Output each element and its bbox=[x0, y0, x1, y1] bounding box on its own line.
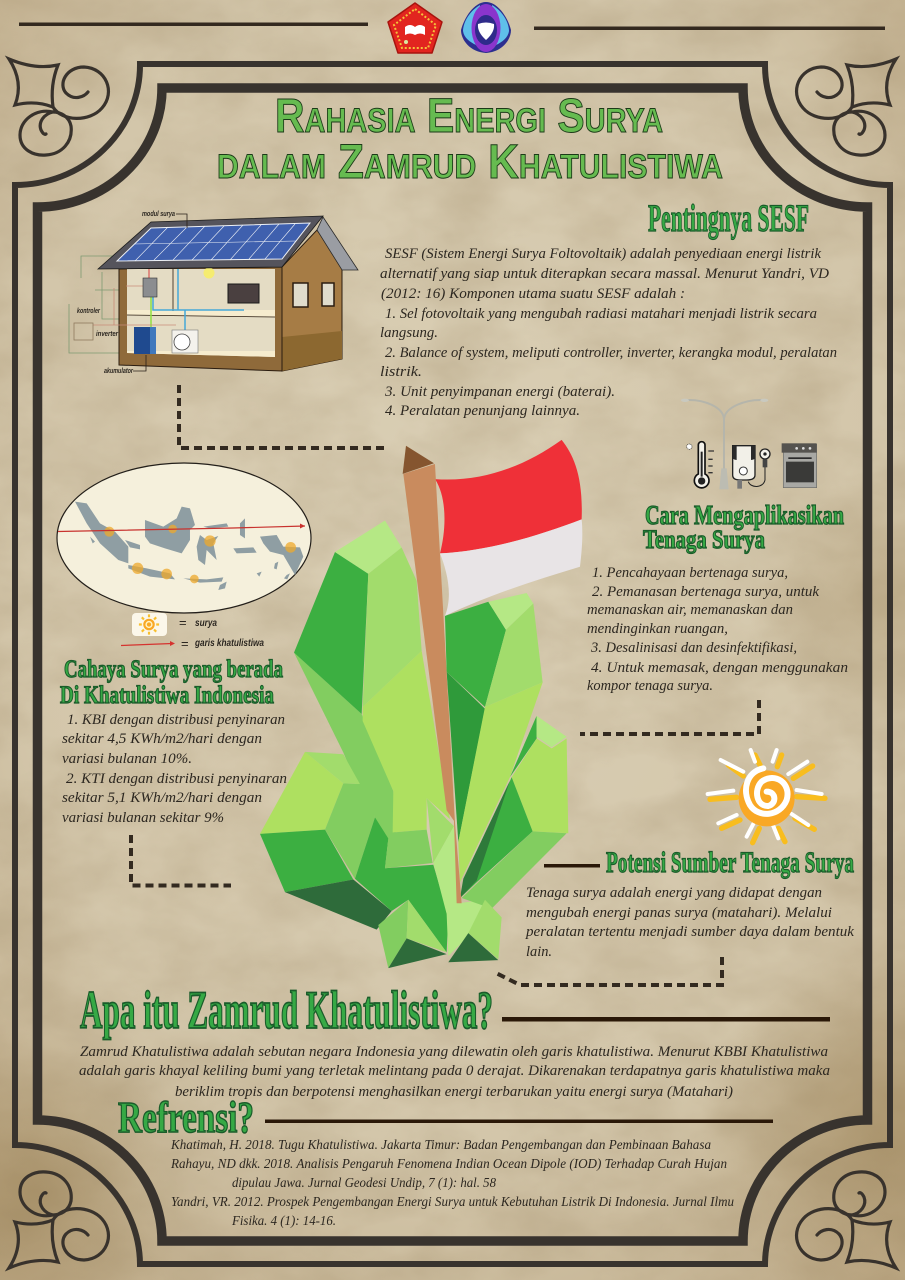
panel: referensi bbox=[118, 1093, 773, 1228]
equator line bbox=[58, 526, 305, 532]
body text: listrik. bbox=[380, 364, 422, 380]
roof bbox=[98, 216, 323, 269]
heading bbox=[60, 656, 283, 709]
map legend: = bbox=[181, 636, 189, 651]
body text: 2. Pemanasan bertenaga surya, untuk bbox=[592, 584, 819, 600]
heading bbox=[643, 500, 844, 554]
inverter box bbox=[74, 323, 93, 340]
body text: langsung. bbox=[380, 325, 438, 341]
body text bbox=[79, 1044, 830, 1100]
illustration: solar house bbox=[69, 211, 358, 375]
panel: apa itu zamrud khatulistiwa bbox=[79, 980, 830, 1100]
side wall bbox=[282, 230, 342, 371]
light bbox=[204, 268, 214, 278]
crystal: left low bbox=[260, 752, 485, 956]
heading: Cara Mengaplikasikan bbox=[645, 500, 844, 530]
heading rule bbox=[544, 864, 600, 868]
map legend: = bbox=[179, 615, 187, 630]
crystal: right tall bbox=[445, 593, 543, 882]
icon: water heater bbox=[733, 446, 770, 489]
emerald crystal with flag bbox=[260, 440, 582, 968]
body text: adalah garis khayal keliling bumi yang terletak melintang pada 0 derajat. Dikarenakan terdapatnya garis khatulistiwa maka bbox=[79, 1063, 830, 1079]
body text: 4. Peralatan penunjang lainnya. bbox=[385, 403, 580, 419]
wires bbox=[153, 269, 244, 330]
house labels bbox=[77, 211, 175, 375]
television bbox=[228, 284, 259, 303]
green wiring bbox=[69, 256, 127, 353]
crystal: bottom small bbox=[378, 900, 502, 968]
body text: 3. Unit penyimpanan energi (baterai). bbox=[384, 384, 615, 400]
body text bbox=[525, 885, 854, 960]
house labels: modul surya bbox=[142, 211, 175, 218]
body text: 2. Balance of system, meliputi controller, inverter, kerangka modul, peralatan bbox=[385, 345, 837, 361]
top rule left bbox=[19, 22, 368, 26]
body text: Zamrud Khatulistiwa adalah sebutan negara Indonesia yang dilewatin oleh garis khatulistiwa. Menurut KBBI Khatulistiwa bbox=[80, 1044, 828, 1060]
crystal: left tall bbox=[294, 520, 450, 844]
crystal: right small bbox=[460, 716, 568, 909]
title: Rahasia Energi Surya bbox=[275, 90, 663, 143]
logo: university crest bbox=[388, 3, 442, 53]
corner ornament bottom left bbox=[9, 1172, 108, 1268]
body text: 3. Desalinisasi dan desinfektifikasi, bbox=[590, 640, 797, 656]
map legend: surya bbox=[195, 618, 217, 629]
flag bbox=[435, 440, 582, 616]
body text: 1. KBI dengan distribusi penyinaran bbox=[67, 712, 285, 728]
icon: sun bbox=[708, 750, 825, 843]
icon: stove bbox=[782, 443, 817, 488]
corner ornament top left bbox=[9, 59, 108, 155]
body text: 1. Sel fotovoltaik yang mengubah radiasi matahari menjadi listrik secara bbox=[385, 306, 817, 322]
meter bbox=[143, 278, 157, 297]
interior bbox=[127, 269, 275, 357]
reference list: Rahayu, ND dkk. 2018. Analisis Pengaruh Fenomena Indian Ocean Dipole (IOD) Terhadap Curah Hujan bbox=[170, 1156, 727, 1171]
body text: 2. KTI dengan distribusi penyinaran bbox=[66, 771, 287, 787]
heading: Refrensi? bbox=[118, 1093, 254, 1142]
body text: variasi bulanan 10%. bbox=[62, 751, 192, 767]
house labels: akumulator bbox=[104, 368, 134, 375]
panel: potensi sumber tenaga surya bbox=[525, 846, 854, 960]
house labels: kontroler bbox=[77, 308, 101, 315]
battery bbox=[134, 327, 156, 354]
top rule right bbox=[534, 26, 885, 30]
panel: pentingnya SESF bbox=[380, 197, 837, 419]
flag pole bbox=[403, 446, 462, 903]
body text: kompor tenaga surya. bbox=[587, 678, 713, 694]
heading rule bbox=[502, 1017, 830, 1022]
body text bbox=[587, 565, 848, 694]
body text bbox=[62, 712, 287, 826]
reference list: Khatimah, H. 2018. Tugu Khatulistiwa. Jakarta Timur: Badan Pengembangan dan Pembinaan Bahasa bbox=[170, 1137, 711, 1152]
appliance icons bbox=[681, 399, 817, 489]
sun markers bbox=[104, 525, 296, 583]
map legend bbox=[121, 613, 264, 651]
body text: variasi bulanan sekitar 9% bbox=[62, 810, 224, 826]
body text: mengubah energi panas surya (matahari). Melalui bbox=[526, 905, 832, 921]
icon: street lamp bbox=[681, 399, 768, 489]
dashed connector: cara bbox=[580, 700, 759, 734]
corner ornament top right bbox=[797, 59, 896, 155]
reference list: Yandri, VR. 2012. Prospek Pengembangan Energi Surya untuk Kebutuhan Listrik Di Indonesia. Jurnal Ilmu bbox=[171, 1194, 734, 1209]
map legend: garis khatulistiwa bbox=[194, 638, 264, 649]
icon: thermometer bbox=[687, 442, 714, 488]
panel: cara mengaplikasikan bbox=[587, 500, 848, 694]
map of Indonesia bbox=[57, 463, 311, 613]
body text: sekitar 4,5 KWh/m2/hari dengan bbox=[62, 731, 262, 747]
house labels: inverter bbox=[96, 331, 119, 338]
dashed connector: house bbox=[179, 385, 385, 448]
heading rule bbox=[265, 1120, 773, 1123]
panel: cahaya surya bbox=[60, 656, 287, 826]
dashed connector: potensi bbox=[494, 957, 722, 985]
body text: (2012: 16) Komponen utama suatu SESF adalah : bbox=[381, 286, 685, 302]
reference list: Fisika. 4 (1): 14-16. bbox=[231, 1213, 336, 1228]
callout leaders bbox=[133, 214, 187, 371]
title: dalam Zamrud Khatulistiwa bbox=[217, 136, 723, 189]
windows bbox=[293, 283, 308, 307]
solar panel bbox=[117, 223, 310, 261]
body text: peralatan tertentu menjadi sumber daya dalam bentuk bbox=[525, 924, 854, 940]
washing machine bbox=[172, 330, 198, 353]
dashed connector: cahaya bbox=[131, 835, 231, 886]
heading: Cahaya Surya yang berada bbox=[64, 656, 283, 683]
heading: Di Khatulistiwa Indonesia bbox=[60, 682, 274, 709]
body text: sekitar 5,1 KWh/m2/hari dengan bbox=[62, 790, 262, 806]
front wall bbox=[119, 267, 282, 371]
islands bbox=[75, 502, 303, 590]
body text: memanaskan air, memanaskan dan bbox=[587, 602, 793, 618]
body text: 1. Pencahayaan bertenaga surya, bbox=[592, 565, 788, 581]
logo: purple shield bbox=[461, 2, 511, 53]
heading: Tenaga Surya bbox=[643, 525, 765, 554]
gable bbox=[317, 217, 358, 270]
reference list bbox=[170, 1137, 734, 1228]
body text: 4. Untuk memasak, dengan menggunakan bbox=[591, 660, 848, 676]
body text: Tenaga surya adalah energi yang didapat dengan bbox=[526, 885, 822, 901]
body text: alternatif yang siap untuk diterapkan secara massal. Menurut Yandri, VD bbox=[380, 266, 829, 282]
reference list: dipulau Jawa. Jurnal Geodesi Undip, 7 (1): hal. 58 bbox=[232, 1175, 496, 1190]
body text: beriklim tropis dan berpotensi menghasilkan energi terbarukan yaitu energi surya (Matahari) bbox=[175, 1084, 733, 1100]
title bbox=[217, 90, 723, 189]
heading: Apa itu Zamrud Khatulistiwa? bbox=[80, 980, 493, 1040]
body text bbox=[380, 246, 837, 419]
body text: SESF (Sistem Energi Surya Foltovoltaik) adalah penyediaan energi listrik bbox=[385, 246, 821, 262]
body text: mendinginkan ruangan, bbox=[587, 621, 728, 637]
corner ornament bottom right bbox=[797, 1172, 896, 1268]
body text: lain. bbox=[526, 944, 552, 960]
